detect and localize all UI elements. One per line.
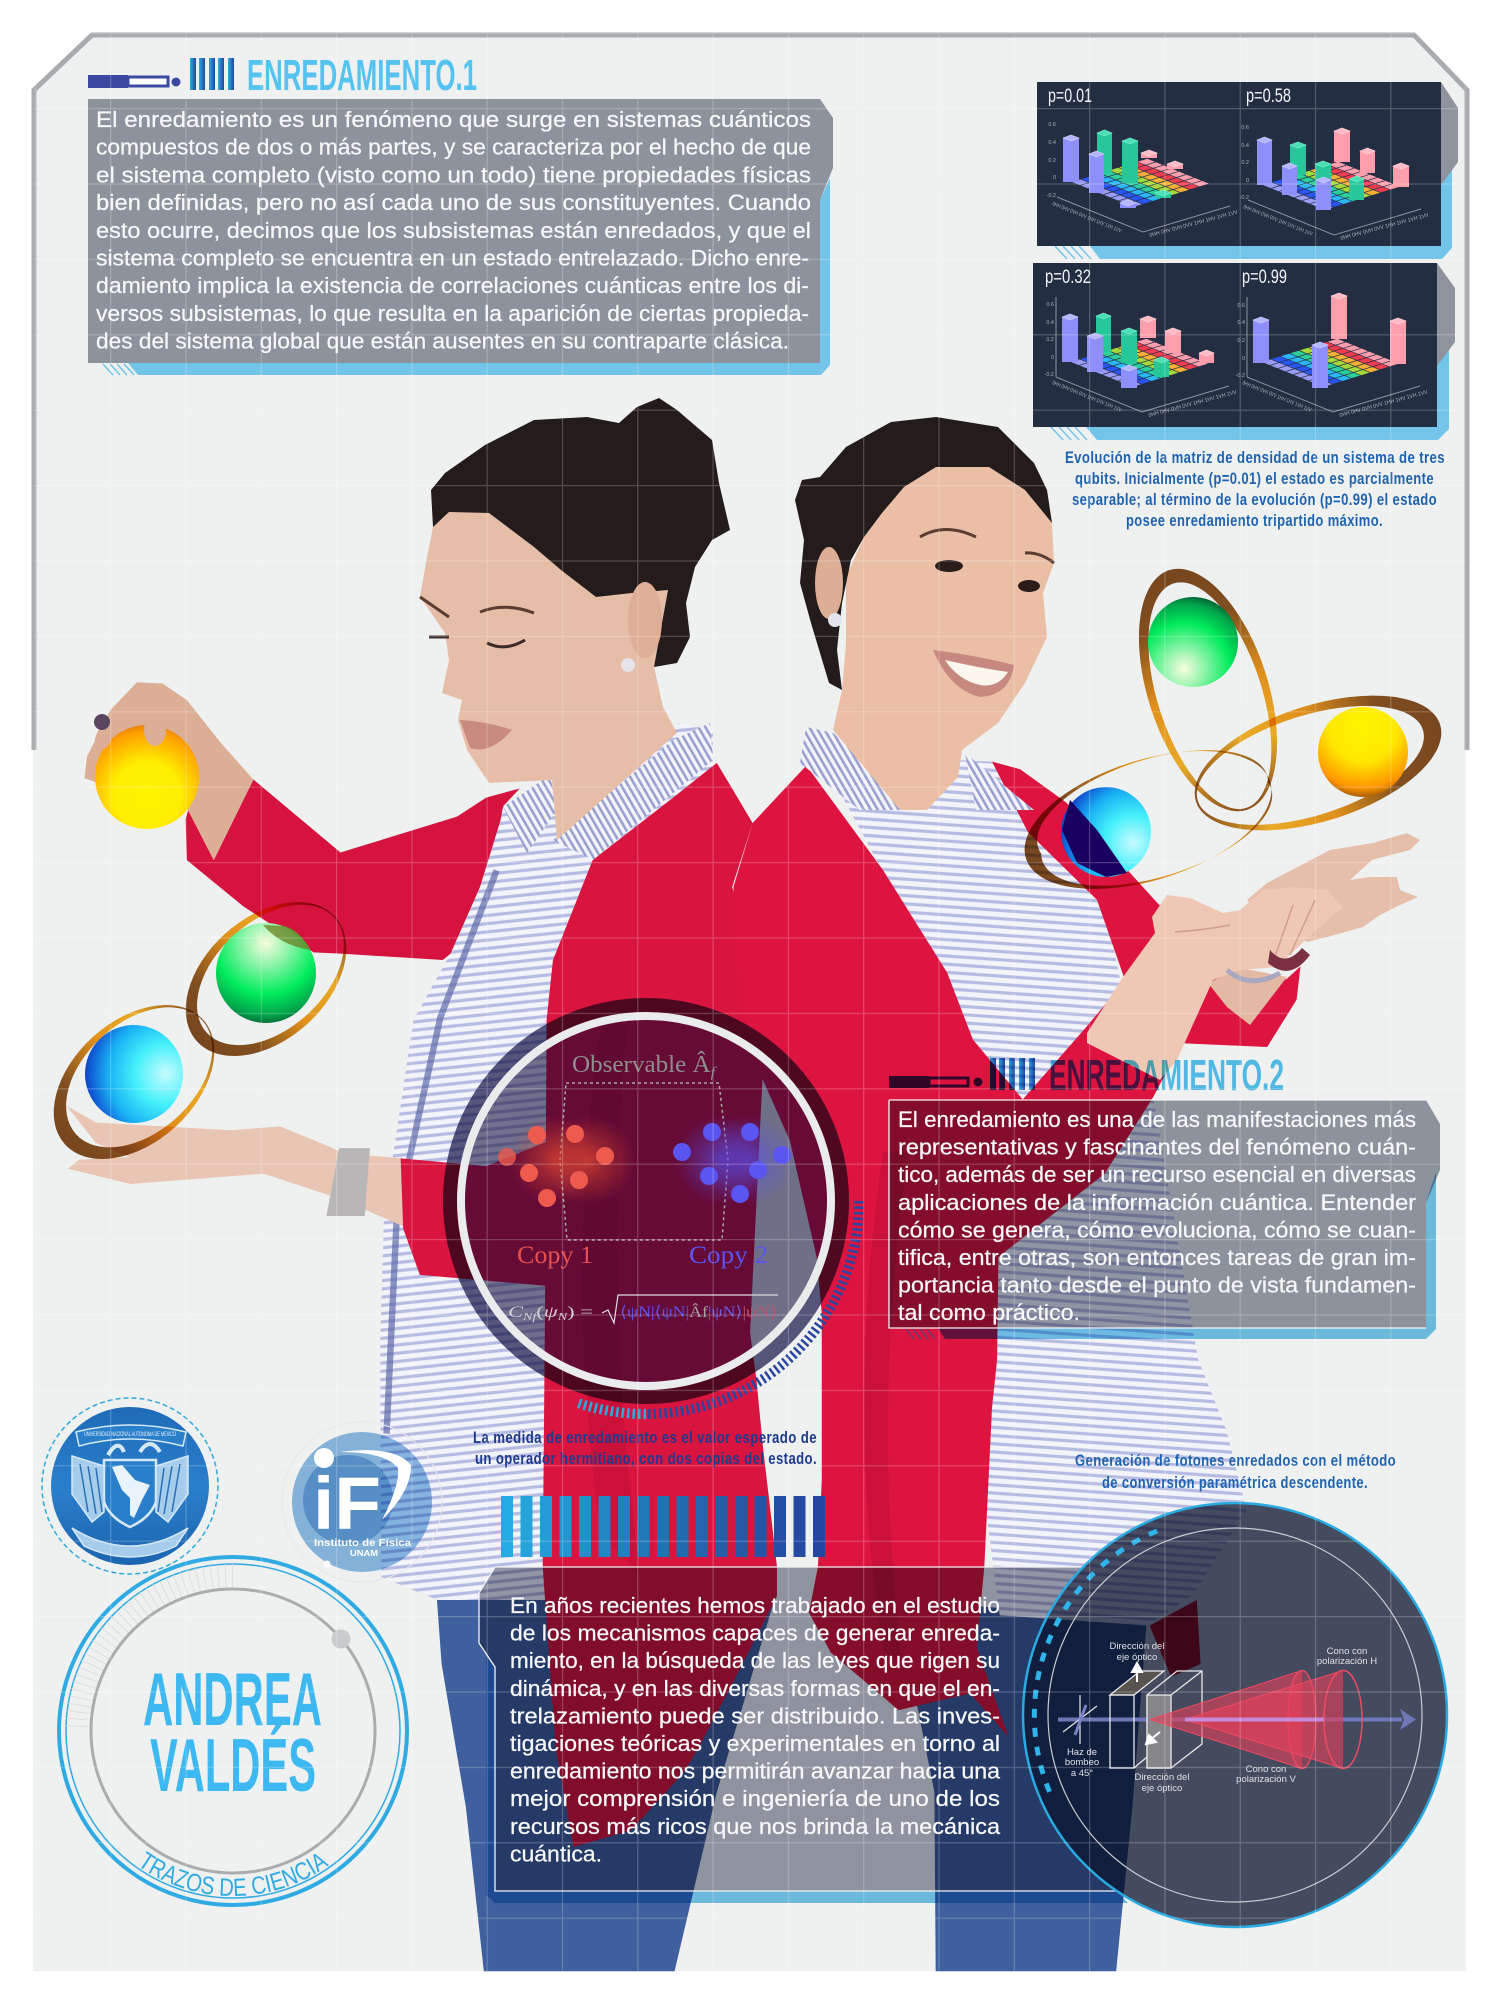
diagram labels: Dirección del: [1135, 1772, 1189, 1783]
badge knob: [332, 1630, 350, 1648]
diagram labels: polarización V: [1236, 1774, 1296, 1785]
panel text: enredamiento nos permitirán avanzar hacia una: [510, 1759, 1001, 1784]
heading bar icon: [889, 1076, 982, 1088]
ribbon: left green orbit: [156, 871, 376, 1087]
chart p=0.01: p=0.01: [1048, 86, 1092, 107]
copy 1 label: Copy 1: [517, 1242, 593, 1269]
panel hatch: [103, 364, 134, 375]
ball: yellow in raised hand: [91, 714, 199, 829]
wrist right: [1208, 968, 1287, 1025]
ribbon: left blue orbit: [24, 974, 244, 1190]
circle lens tint: [457, 1012, 835, 1390]
head left: [420, 398, 730, 840]
panel text: El enredamiento es una de las manifestaciones más: [898, 1107, 1416, 1132]
name: ANDREA: [143, 1657, 322, 1741]
panel: enredamiento 2: [889, 1051, 1440, 1339]
chart p=0.58: 0: [1246, 178, 1249, 184]
chart p=0.32: 0: [1051, 355, 1054, 361]
panel: research text: [479, 1567, 1128, 1903]
watch: [326, 1148, 370, 1216]
panel text: sistema completo se encuentra en un estado entrelazado. Dicho enre-: [96, 246, 809, 270]
panel text: cuántica.: [510, 1841, 602, 1866]
chart caption: posee enredamiento tripartido máximo.: [1126, 511, 1383, 530]
upper chart backing: [1090, 165, 1452, 259]
name badge: TRAZOS DE CIENCIA: [141, 1851, 329, 1896]
jeans right: [896, 1600, 1147, 1971]
cone H: [1185, 1670, 1362, 1768]
chart p=0.58: 0.4: [1241, 143, 1249, 149]
collar right: [800, 727, 1034, 810]
formula: ) =: [567, 1304, 593, 1321]
cone V: [1150, 1670, 1316, 1768]
heading text: ENREDAMIENTO.2: [1049, 1051, 1284, 1100]
stray hem: [1149, 1600, 1201, 1677]
tick arc cyan: [578, 1403, 646, 1414]
circle outer band: [450, 1005, 842, 1397]
chart p=0.99: 0HH 0HV 0VH 0VV 1HH 1HV 1VH 1VV: [1241, 380, 1312, 414]
panel text: En años recientes hemos trabajado en el estudio: [510, 1593, 1000, 1618]
panel text: compuestos de dos o más partes, y se caracteriza por el hecho de que: [96, 135, 811, 160]
diagram labels: bombeo: [1065, 1757, 1099, 1768]
observable label: f: [711, 1065, 717, 1081]
chart p=0.58: -0.2: [1240, 195, 1249, 201]
chart p=0.58: 0HH 0HV 0VH 0VV 1HH 1HV 1VH 1VV: [1242, 204, 1313, 238]
university name: UNIVERSIDAD NACIONAL AUTONOMA DE MEXICO: [84, 1432, 176, 1438]
panel box: [88, 99, 833, 363]
chart p=0.32: 0.2: [1046, 337, 1054, 343]
chart p=0.99: 0.4: [1237, 320, 1245, 326]
badge ticks: [78, 1576, 233, 1731]
badge rings: [59, 1557, 407, 1905]
chart p=0.01: 0.2: [1048, 158, 1056, 164]
panel outline: [479, 1567, 1117, 1891]
beam highlight: [1185, 1718, 1324, 1722]
panel text: versos subsistemas, lo que resulta en la aparición de ciertas propieda-: [96, 301, 809, 326]
collar left: [503, 723, 713, 860]
ball: blue right: [1061, 787, 1151, 877]
circle caption: [473, 1428, 817, 1468]
panel text: representativas y fascinantes del fenómeno cuán-: [898, 1135, 1416, 1160]
heading stripes: [190, 58, 234, 90]
blue copy dots: [673, 1115, 795, 1205]
chart p=0.99: 0HH 0HV 0VH 0VV 1HH 1HV 1VH 1VV: [1339, 390, 1429, 419]
panel text: El enredamiento es un fenómeno que surge en sistemas cuánticos: [96, 107, 811, 132]
beam arrow: [1400, 1709, 1416, 1730]
chart p=0.01: -0.2: [1047, 193, 1056, 199]
chart p=0.32: -0.2: [1045, 372, 1054, 378]
copy 2 label: Copy 2: [689, 1242, 768, 1269]
circle lens: [457, 1012, 835, 1390]
chart p=0.58: [1240, 86, 1430, 242]
jeans left: [436, 1594, 774, 1971]
panel: density matrix charts: [1033, 82, 1458, 530]
panel text: aplicaciones de la información cuántica. Entender: [898, 1190, 1416, 1215]
name badge: [57, 1555, 409, 1907]
chart p=0.32: 0.4: [1046, 320, 1054, 326]
crystal 2: [1147, 1671, 1202, 1768]
chart p=0.32: [1045, 267, 1238, 419]
diagram caption: de conversión paramétrica descendente.: [1102, 1473, 1368, 1492]
panel text: portancia tanto desde el punto de vista fundamen-: [898, 1273, 1416, 1298]
chart p=0.58: 0.2: [1241, 160, 1249, 166]
UNAM crest: [72, 1425, 188, 1557]
chart p=0.32: 0HH 0HV 0VH 0VV 1HH 1HV 1VH 1VV: [1051, 380, 1122, 414]
diagram labels: Cono con: [1246, 1764, 1286, 1775]
dashed arc: [1034, 1531, 1157, 1793]
hand right back: [1247, 833, 1420, 942]
chart p=0.01: 0HH 0HV 0VH 0VV 1HH 1HV 1VH 1VV: [1051, 201, 1122, 235]
logo: UNAM: [42, 1398, 218, 1574]
panel text: esto ocurre, decimos que los subsistemas están enredados, y que el: [96, 218, 811, 243]
chart p=0.58: 0HH 0HV 0VH 0VV 1HH 1HV 1VH 1VV: [1340, 213, 1430, 242]
chart p=0.99: [1236, 267, 1429, 419]
diagram labels: eje óptico: [1117, 1652, 1157, 1663]
ball: green right: [1148, 597, 1238, 687]
left raised sleeve: [186, 780, 520, 960]
shirt seam: [387, 870, 497, 1434]
panel text: [96, 107, 811, 354]
diagram labels: a 45°: [1071, 1768, 1093, 1779]
panel text: bien definidas, pero no así cada uno de sus constituyentes. Cuando: [96, 190, 811, 215]
bracelet: [1227, 970, 1280, 981]
panel hatch: [906, 1329, 935, 1339]
panel text: de los mecanismos capaces de generar enreda-: [510, 1621, 1000, 1646]
bar stripes above text: [501, 1496, 825, 1557]
chart p=0.32: p=0.32: [1045, 267, 1091, 288]
formula: Nf: [522, 1312, 538, 1323]
heading stripes: [990, 1058, 1035, 1090]
tick arc dark: [646, 1201, 859, 1414]
formula: ψ: [544, 1304, 554, 1321]
panel: enredamiento 1: [88, 51, 833, 375]
panel shadow: [128, 178, 830, 375]
heading bar icon: [88, 75, 180, 88]
panel text: tal como práctico.: [898, 1300, 1080, 1325]
logo: Instituto de Física: UNAM: [350, 1549, 378, 1558]
cardigan left: [543, 763, 777, 1847]
chart hatching: [1051, 246, 1091, 440]
shirt left: [380, 723, 713, 1600]
diagram caption: [1075, 1451, 1396, 1492]
crystal 1: [1110, 1671, 1164, 1768]
chart p=0.01: 0.4: [1048, 140, 1056, 146]
arc label: [68, 1731, 398, 1896]
panel text: miento, en la búsqueda de las leyes que rigen su: [510, 1648, 1000, 1673]
diagram labels: Dirección del: [1110, 1641, 1164, 1652]
diagram labels: Cono con: [1327, 1646, 1367, 1657]
diagram labels: Haz de: [1067, 1747, 1097, 1758]
lower chart panel: [1033, 263, 1437, 427]
disc rim: [1023, 1503, 1447, 1927]
disc inner ring: [1048, 1528, 1422, 1902]
chart caption: [1065, 448, 1445, 530]
name badge: VALDÉS: [150, 1723, 316, 1807]
left raised forearm and hand: [84, 682, 253, 860]
diagram caption: Generación de fotones enredados con el método: [1075, 1451, 1396, 1470]
logo: Instituto de Física: [282, 1422, 442, 1582]
panel: photon generation diagram: [1023, 1451, 1447, 1927]
heading text: ENREDAMIENTO.1: [247, 51, 477, 100]
continent: [112, 1465, 150, 1518]
observable dashed box: [560, 1083, 728, 1240]
diagram labels: eje óptico: [1142, 1783, 1182, 1794]
panel: entanglement measure circle: [450, 1005, 859, 1468]
formula: N: [556, 1312, 569, 1323]
chart p=0.01: 0.6: [1048, 122, 1056, 128]
chart p=0.01: 0HH 0HV 0VH 0VV 1HH 1HV 1VH 1VV: [1149, 210, 1239, 239]
chart p=0.99: -0.2: [1236, 373, 1245, 379]
ball: yellow right: [1318, 707, 1408, 797]
chart p=0.32: 0HH 0HV 0VH 0VV 1HH 1HV 1VH 1VV: [1148, 390, 1238, 419]
IF mark: iF: [313, 1462, 381, 1545]
formula: C: [508, 1304, 519, 1321]
chart p=0.99: 0.6: [1237, 303, 1245, 309]
ribbon: right yellow orbit: [1178, 669, 1458, 857]
bodies: [67, 682, 1300, 1971]
left lower hand: [67, 1106, 403, 1226]
red copy dots: [498, 1115, 635, 1207]
beam axis: [1058, 1718, 1402, 1722]
chart p=0.99: 0: [1242, 356, 1245, 362]
ribbon: right blue orbit: [1008, 724, 1288, 916]
ball: blue left: [85, 1025, 183, 1123]
diagram labels: [1065, 1641, 1377, 1794]
polarization cross: [1063, 1695, 1097, 1744]
panel text: tico, además de ser un recurso esencial en diversas: [898, 1162, 1416, 1187]
panel box: [889, 1100, 1440, 1328]
ball: green left: [216, 923, 316, 1023]
panel text: trelazamiento puede ser distribuido. Las inves-: [510, 1703, 1000, 1728]
cardigan folds: [582, 1024, 909, 1664]
panel text: dinámica, y en las diversas formas en que el en-: [510, 1676, 1000, 1701]
cardigan right: [733, 762, 1300, 1737]
left lower sleeve: [401, 1139, 553, 1286]
upper chart panel: [1037, 82, 1441, 246]
panel shadow: [486, 1656, 1128, 1903]
figure: two women back to back: [67, 398, 1420, 1971]
institute name: Instituto de Física: [314, 1538, 411, 1549]
panel text: cómo se genera, cómo evoluciona, cómo se cuan-: [898, 1217, 1416, 1242]
panel text: des del sistema global que están ausentes en su contraparte clásica.: [96, 329, 789, 354]
diagram disc: [1023, 1503, 1447, 1927]
diagram labels: polarización H: [1317, 1656, 1377, 1667]
lower chart backing: [1086, 345, 1449, 440]
chart p=0.99: p=0.99: [1242, 267, 1287, 288]
chart p=0.58: 0.6: [1241, 125, 1249, 131]
chart p=0.58: p=0.58: [1246, 86, 1291, 107]
formula: ⟨ψN|⟨ψN| Âf|ψN⟩|ψN⟩: [620, 1302, 777, 1321]
ring: [1268, 948, 1310, 971]
chart p=0.32: 0.6: [1046, 302, 1054, 308]
panel text: damiento implica la existencia de correlaciones cuánticas entre los di-: [96, 273, 809, 298]
panel text: tigaciones teóricas y experimentales en torno al: [510, 1731, 1000, 1756]
formula: (: [536, 1304, 544, 1321]
observable label: Observable Â: [572, 1052, 705, 1078]
panel outline: [889, 1100, 1426, 1328]
finger creases: [1175, 900, 1315, 965]
formula: [508, 1295, 778, 1323]
panel text: el sistema completo (visto como un todo) tiene propiedades físicas: [96, 162, 811, 187]
top frame: [34, 35, 1467, 750]
circle caption: un operador hermitiano, con dos copias del estado.: [475, 1449, 817, 1468]
chart p=0.01: 0: [1053, 175, 1056, 181]
axis arrows: [1132, 1663, 1160, 1744]
panel text: tifica, entre otras, son entonces tareas de gran im-: [898, 1245, 1416, 1270]
circle caption: La medida de enredamiento es el valor esperado de: [473, 1428, 817, 1447]
chart p=0.99: 0.2: [1237, 338, 1245, 344]
panel text: mejor comprensión e ingeniería de uno de los: [510, 1786, 1000, 1811]
ribbon: right green orbit: [1112, 552, 1304, 828]
lower chart notch: [1437, 263, 1455, 366]
circle ring: [461, 1016, 831, 1386]
panel shadow: [938, 1172, 1436, 1339]
panel text: [510, 1593, 1001, 1866]
hand right front: [1087, 887, 1343, 1080]
panel box: [479, 1567, 1117, 1891]
panel text: [898, 1107, 1416, 1325]
chart p=0.01: [1047, 86, 1239, 239]
head right: [795, 417, 1054, 810]
upper chart notch: [1441, 82, 1458, 185]
shirt right: [806, 730, 1247, 1626]
panel text: recursos más ricos que nos brinda la mecánica: [510, 1814, 1001, 1839]
